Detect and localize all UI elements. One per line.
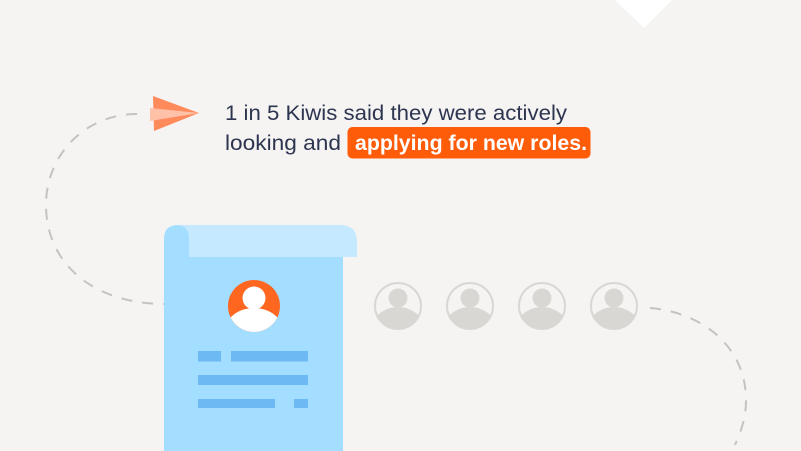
- document text lines: [198, 351, 308, 408]
- icon: orange profile avatar: [228, 280, 280, 332]
- icon: grey person 1: [374, 282, 422, 330]
- callout: highlighted phrase: applying for new roles.: [355, 132, 587, 155]
- text: statistic line one: 1 in 5 Kiwis said they were actively: [225, 102, 568, 125]
- icon: paper plane: [150, 96, 199, 131]
- document body: [164, 225, 343, 451]
- panel: resume document: [164, 225, 357, 451]
- icon: grey person 2: [446, 282, 494, 330]
- text: statistic line two: looking and: [225, 132, 341, 155]
- icon: grey person 3: [518, 282, 566, 330]
- top notch: [615, 0, 672, 28]
- document scroll top: [176, 225, 357, 257]
- icon: grey person 4: [590, 282, 638, 330]
- callout: highlighted phrase: [348, 127, 590, 158]
- dashed path: right curve: [650, 308, 746, 445]
- dashed path: left loop: [46, 114, 165, 304]
